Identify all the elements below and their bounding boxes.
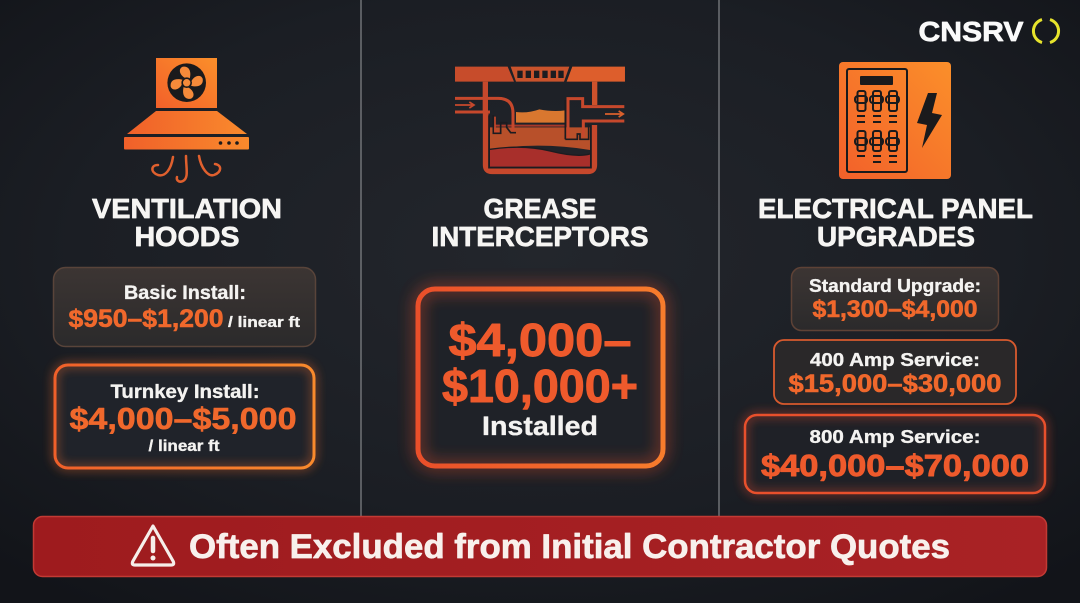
panel: electrical panel upgrades [745, 62, 1045, 493]
heading: electrical panel upgrades: ELECTRICAL PANEL [758, 193, 1033, 224]
banner text: Often Excluded from Initial Contractor Quotes [189, 528, 950, 566]
card: 400 amp service [774, 340, 1016, 404]
icon: electrical panel [839, 62, 951, 179]
card: installed cost [418, 289, 663, 466]
card: basic install: / linear ft [228, 314, 300, 331]
card: 400 amp service: 400 Amp Service: [810, 350, 980, 370]
heading: electrical panel upgrades [758, 193, 1033, 252]
heading: ventilation hoods: HOODS [134, 221, 240, 252]
panel: grease interceptors [418, 67, 663, 466]
card: 400 amp service: $15,000–$30,000 [788, 370, 1002, 398]
card: basic install: Basic Install: [124, 283, 246, 304]
panel: ventilation hoods [54, 58, 316, 468]
icon: grease interceptor [455, 67, 625, 171]
logo: CNSRV [918, 16, 1059, 47]
card: standard upgrade: Standard Upgrade: [809, 276, 981, 296]
card: 800 amp service [745, 415, 1045, 493]
card: turnkey install: / linear ft [148, 438, 220, 455]
card: installed cost: Installed [482, 411, 598, 441]
card: basic install [54, 268, 316, 346]
icon: warning triangle [132, 526, 174, 565]
heading: grease interceptors [432, 193, 648, 252]
card: turnkey install [55, 365, 314, 468]
heading: grease interceptors: GREASE [484, 193, 596, 224]
card: standard upgrade [792, 268, 998, 330]
card: basic install: $950–$1,200 [68, 305, 224, 333]
card: turnkey install: $4,000–$5,000 [70, 401, 296, 436]
heading: electrical panel upgrades: UPGRADES [817, 221, 975, 252]
card: 800 amp service: 800 Amp Service: [810, 427, 980, 447]
card: standard upgrade: $1,300–$4,000 [812, 296, 978, 323]
heading: ventilation hoods: VENTILATION [92, 193, 282, 224]
logo: CNSRV: CNSRV [918, 16, 1024, 47]
card: turnkey install: Turnkey Install: [110, 382, 260, 403]
icon: ventilation hood [124, 58, 249, 182]
card: installed cost: $4,000– [448, 314, 632, 366]
card: installed cost: $10,000+ [442, 360, 638, 412]
banner: often excluded [34, 516, 1046, 576]
heading: grease interceptors: INTERCEPTORS [432, 221, 648, 252]
heading: ventilation hoods [92, 193, 282, 252]
card: 800 amp service: $40,000–$70,000 [761, 448, 1029, 483]
